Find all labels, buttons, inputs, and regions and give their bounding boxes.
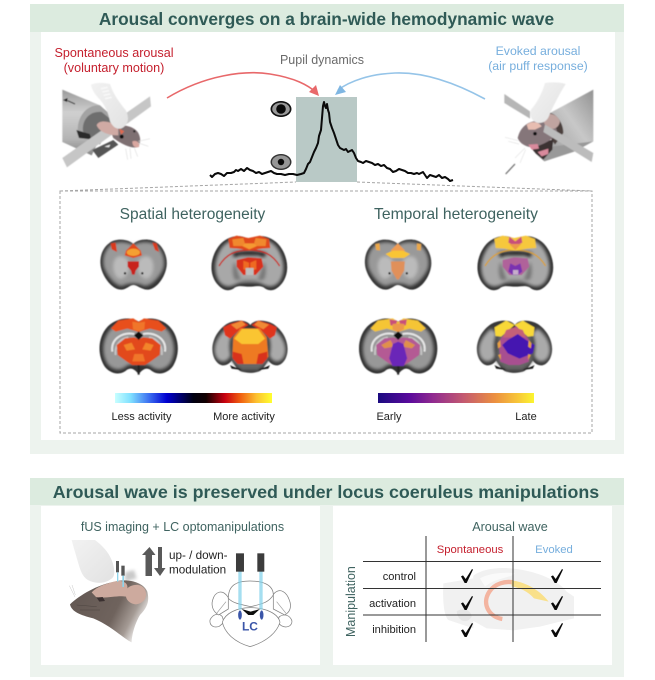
- icon: pupil constricted: [270, 154, 292, 170]
- diagram: LC section with fibers: LC: [242, 620, 258, 634]
- icon: up and down arrows: [142, 547, 166, 576]
- brain: temporal anterior 1: [365, 240, 431, 290]
- check marks: [461, 569, 563, 637]
- panel: top header band: [30, 4, 624, 32]
- label: early: Early: [376, 411, 402, 423]
- brain: temporal posterior 2: [477, 321, 552, 373]
- brain: spatial anterior 2: [211, 236, 287, 290]
- table: arousal wave results: [344, 520, 601, 642]
- label: evoked arousal: (air puff response): [488, 59, 588, 73]
- chart: pupil trace: [210, 102, 453, 181]
- diagram: LC section with fibers: [210, 553, 292, 647]
- brain outline watermark: [443, 568, 574, 630]
- label: evoked arousal: Evoked arousal: [496, 44, 580, 58]
- label: modulation: modulation: [169, 564, 226, 576]
- label: spontaneous arousal: (voluntary motion): [64, 61, 164, 75]
- title: top: Arousal converges on a brain-wide hemodynamic wave: [99, 9, 554, 29]
- heading: temporal heterogeneity: Temporal heterogeneity: [374, 206, 538, 223]
- label: late: Late: [515, 411, 537, 423]
- panel: bottom background: [30, 478, 624, 677]
- text: manipulation axis: Manipulation: [344, 566, 358, 637]
- heading: fUS imaging: fUS imaging + LC optomanipulations: [81, 520, 284, 534]
- highlight: pupil peak window: [296, 97, 357, 182]
- brain: temporal anterior 2: [477, 236, 553, 290]
- text: column evoked: Evoked: [535, 544, 573, 556]
- icon: mouse head with probes: [69, 540, 148, 642]
- arrow: spontaneous to pupil: [167, 73, 319, 98]
- brain: temporal mid 1: [359, 318, 437, 375]
- label: modulation: up- / down-: [169, 549, 228, 562]
- panel: optomanipulation: [41, 506, 320, 665]
- text: rows: control: [383, 571, 416, 583]
- label: less activity: Less activity: [112, 411, 172, 423]
- panel: dashed zoom box: [60, 182, 592, 433]
- brain: spatial mid 1: [99, 318, 178, 375]
- icon: pupil dilated: [270, 101, 292, 117]
- panel: top white area: [41, 32, 615, 440]
- label: pupil dynamics: Pupil dynamics: [280, 53, 364, 67]
- text: column spontaneous: Spontaneous: [437, 544, 504, 556]
- text: table heading: Arousal wave: [472, 520, 548, 534]
- panel: bottom header band: [30, 478, 624, 505]
- text: rows: inhibition: [372, 624, 416, 636]
- panel: top background: [30, 4, 624, 454]
- panel: results table: [333, 506, 612, 665]
- heading: spatial heterogeneity: Spatial heterogeneity: [120, 206, 266, 223]
- grid lines: [363, 536, 601, 642]
- icon: left mouse in tube: [62, 83, 151, 167]
- colorbar: activity: [115, 393, 272, 403]
- icon: right mouse in tube: [504, 82, 593, 174]
- arrow: evoked to pupil: [335, 73, 485, 99]
- brain: spatial posterior 2: [212, 321, 288, 373]
- label: more activity: More activity: [213, 411, 275, 423]
- title: bottom: Arousal wave is preserved under locus coeruleus manipulations: [53, 482, 599, 502]
- colorbar: timing: [378, 393, 534, 403]
- brain: spatial anterior 1: [100, 240, 167, 290]
- text: rows: activation: [369, 598, 416, 610]
- label: spontaneous arousal: Spontaneous arousal: [54, 46, 174, 60]
